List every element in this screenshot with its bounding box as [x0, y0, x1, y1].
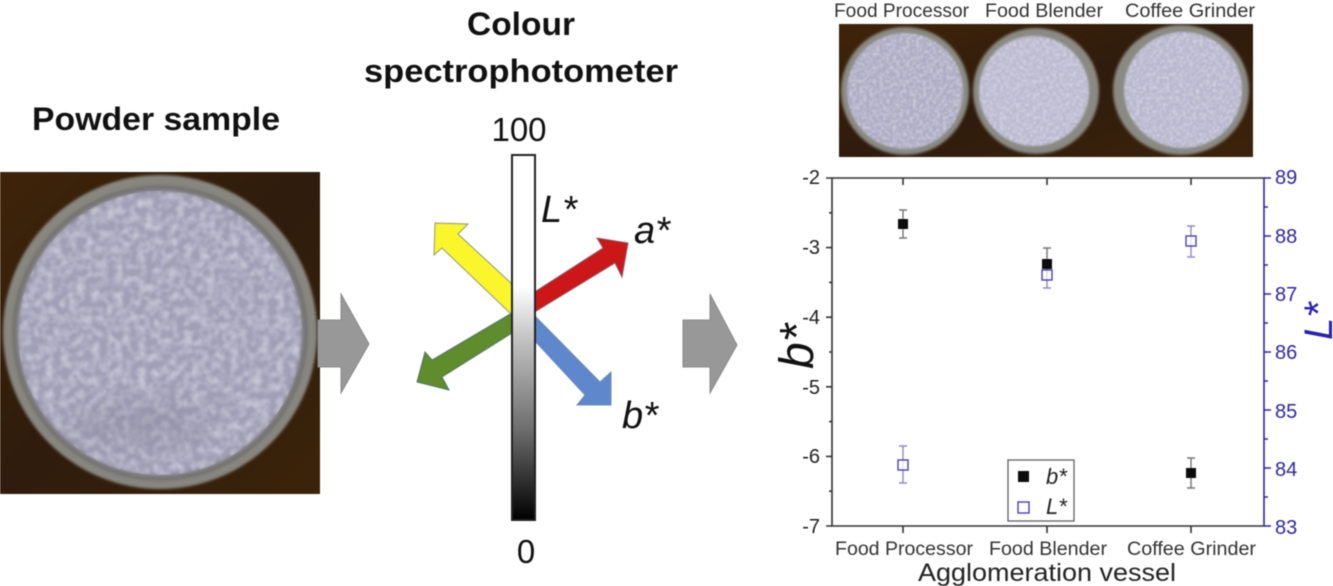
error bars	[899, 210, 1195, 488]
label: b*: b*	[622, 395, 659, 437]
left axis numbers: -4	[802, 307, 820, 329]
scatter chart	[771, 167, 1333, 586]
photo: three vessel samples	[839, 24, 1253, 157]
data points b*	[898, 219, 1196, 478]
left axis numbers: -7	[802, 516, 820, 538]
category labels: Food Processor	[835, 539, 974, 560]
label: 100: 100	[491, 111, 547, 148]
right axis numbers: 86	[1275, 342, 1297, 364]
right axis numbers: 85	[1275, 401, 1297, 423]
left axis numbers	[802, 167, 820, 538]
left axis numbers: -2	[802, 167, 820, 189]
photo: powder sample dish	[0, 172, 320, 494]
label: a*: a*	[634, 210, 671, 252]
arrow: green -a	[417, 313, 512, 390]
label: L*: L*	[541, 189, 578, 231]
heading: powder sample: Powder sample	[32, 101, 280, 137]
legend: L*	[1046, 494, 1068, 519]
scale bar: L* lightness	[512, 155, 535, 520]
left axis title: b*	[771, 322, 824, 369]
heading: colour spectrophotometer: spectrophotometer	[364, 53, 678, 89]
heading: colour spectrophotometer	[364, 6, 678, 89]
right axis numbers: 89	[1275, 167, 1297, 189]
category labels: Coffee Grinder	[1127, 539, 1257, 560]
arrow: red a*	[533, 238, 628, 313]
vessel captions: Food Blender	[985, 1, 1104, 22]
left axis numbers: -6	[802, 446, 820, 468]
right axis numbers: 87	[1275, 284, 1297, 306]
right axis numbers	[1275, 167, 1297, 539]
right axis numbers: 83	[1275, 517, 1297, 539]
category labels	[835, 539, 1257, 560]
right axis numbers: 88	[1275, 226, 1297, 248]
category labels: Food Blender	[989, 539, 1108, 560]
vessel captions	[834, 1, 1256, 22]
arrow: spectrophotometer to results	[683, 294, 737, 393]
label: 0: 0	[517, 533, 535, 570]
left axis numbers: -5	[802, 377, 820, 399]
legend	[1008, 460, 1074, 521]
heading: colour spectrophotometer: Colour	[467, 6, 575, 42]
arrow: blue b*	[534, 315, 611, 405]
arrow: yellow -b	[434, 223, 512, 315]
arrow: sample to spectrophotometer	[318, 294, 369, 393]
data points L*	[898, 236, 1196, 470]
vessel captions: Coffee Grinder	[1125, 1, 1256, 22]
vessel captions: Food Processor	[834, 1, 970, 22]
left axis numbers: -3	[802, 237, 820, 259]
colour space diagram	[417, 111, 671, 570]
legend: b*	[1046, 464, 1068, 489]
plot axes	[826, 178, 1271, 533]
right axis numbers: 84	[1275, 459, 1297, 481]
